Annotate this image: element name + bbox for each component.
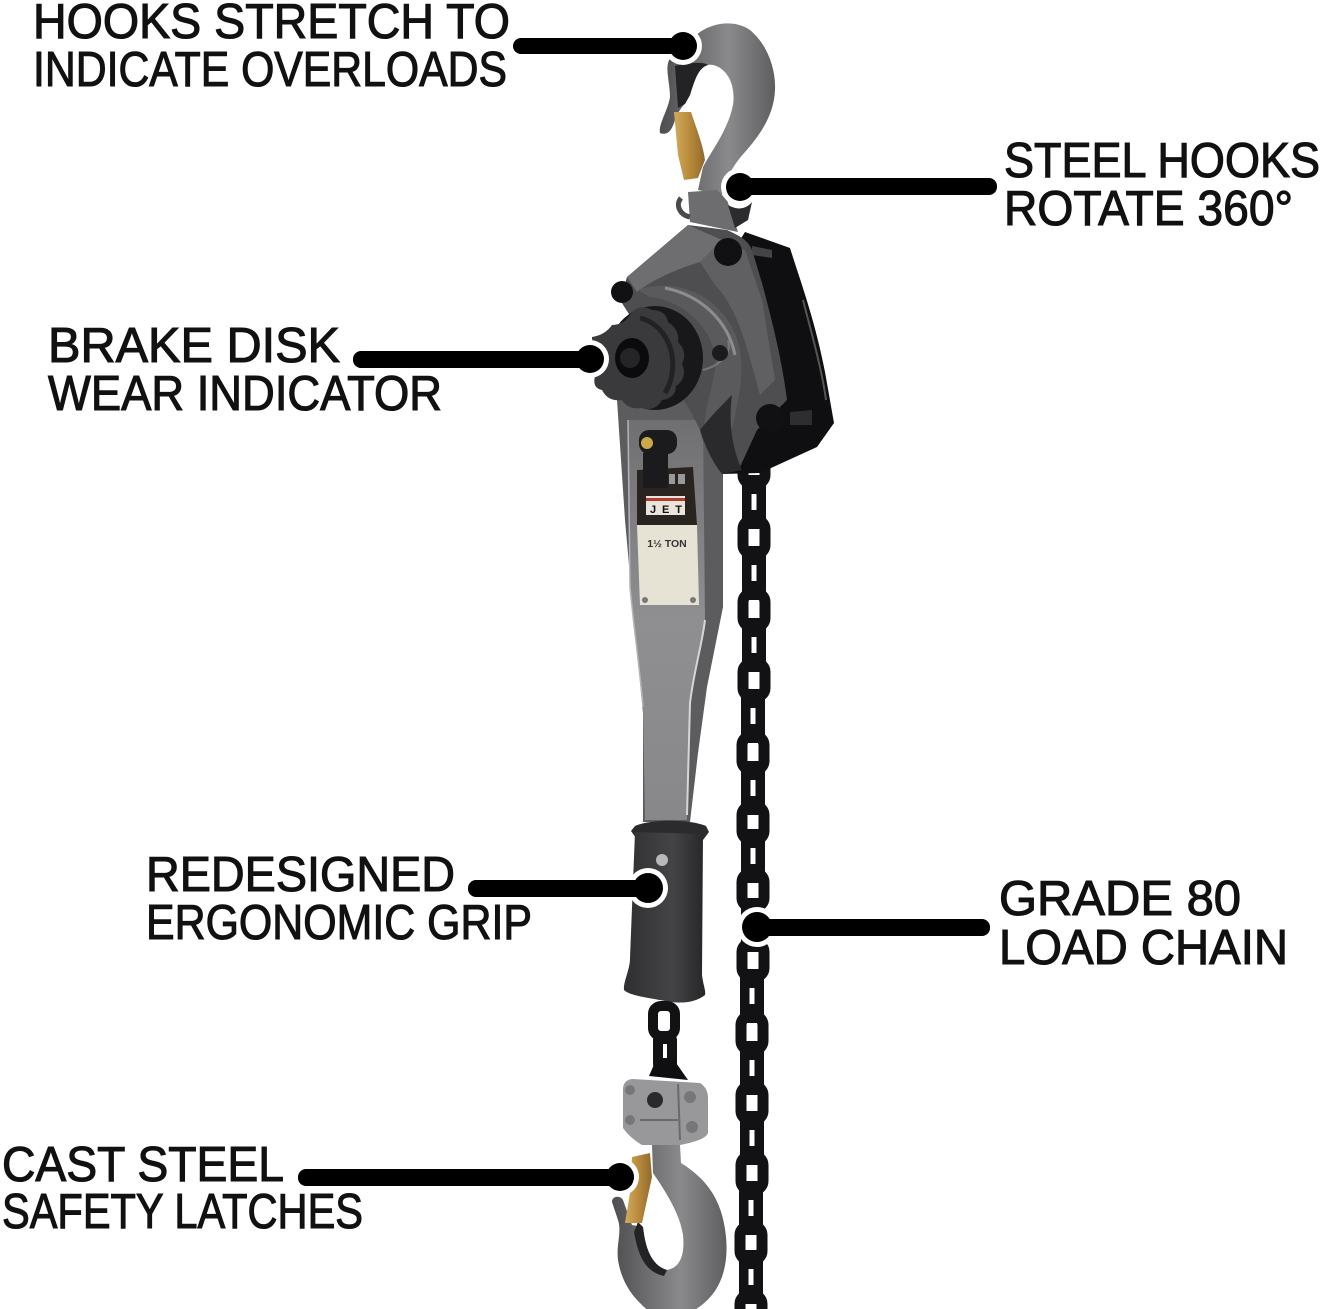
name plate — [637, 453, 699, 605]
callout: steel hooks rotate: ROTATE 360° — [1004, 182, 1293, 236]
grip — [624, 821, 709, 1003]
lever arm — [617, 370, 723, 822]
brake disk — [592, 306, 703, 410]
name plate: JET — [650, 504, 682, 516]
bottom hook — [612, 1145, 727, 1309]
callout: brake disk wear indicator: WEAR INDICATOR — [48, 367, 442, 421]
callout: brake disk wear indicator: BRAKE DISK — [48, 319, 340, 373]
housing — [611, 225, 787, 474]
callout: redesigned ergonomic grip — [146, 848, 668, 950]
brake button — [639, 430, 677, 493]
callout: hooks stretch — [33, 0, 702, 97]
load chain — [739, 450, 766, 1309]
callout: grade 80 load chain — [737, 872, 1288, 975]
lower chain — [649, 1006, 688, 1080]
top hook — [660, 23, 775, 232]
back plate — [722, 232, 834, 474]
callout: cast steel safety latches: CAST STEEL — [2, 1138, 284, 1192]
hoist — [592, 23, 834, 1309]
callout: cast steel safety latches — [2, 1138, 639, 1239]
callout: grade 80 load chain: LOAD CHAIN — [999, 921, 1288, 975]
callout: redesigned ergonomic grip: ERGONOMIC GRIP — [146, 896, 532, 950]
callout: brake disk wear indicator — [48, 319, 609, 421]
name plate: 1½ TON — [647, 538, 687, 550]
callout: redesigned ergonomic grip: REDESIGNED — [146, 848, 455, 902]
swivel block — [623, 1079, 708, 1145]
callout: hooks stretch: INDICATE OVERLOADS — [33, 43, 507, 97]
callout: cast steel safety latches: SAFETY LATCHES — [2, 1185, 363, 1239]
callout: steel hooks rotate — [721, 134, 1320, 236]
callout: grade 80 load chain: GRADE 80 — [999, 872, 1241, 926]
